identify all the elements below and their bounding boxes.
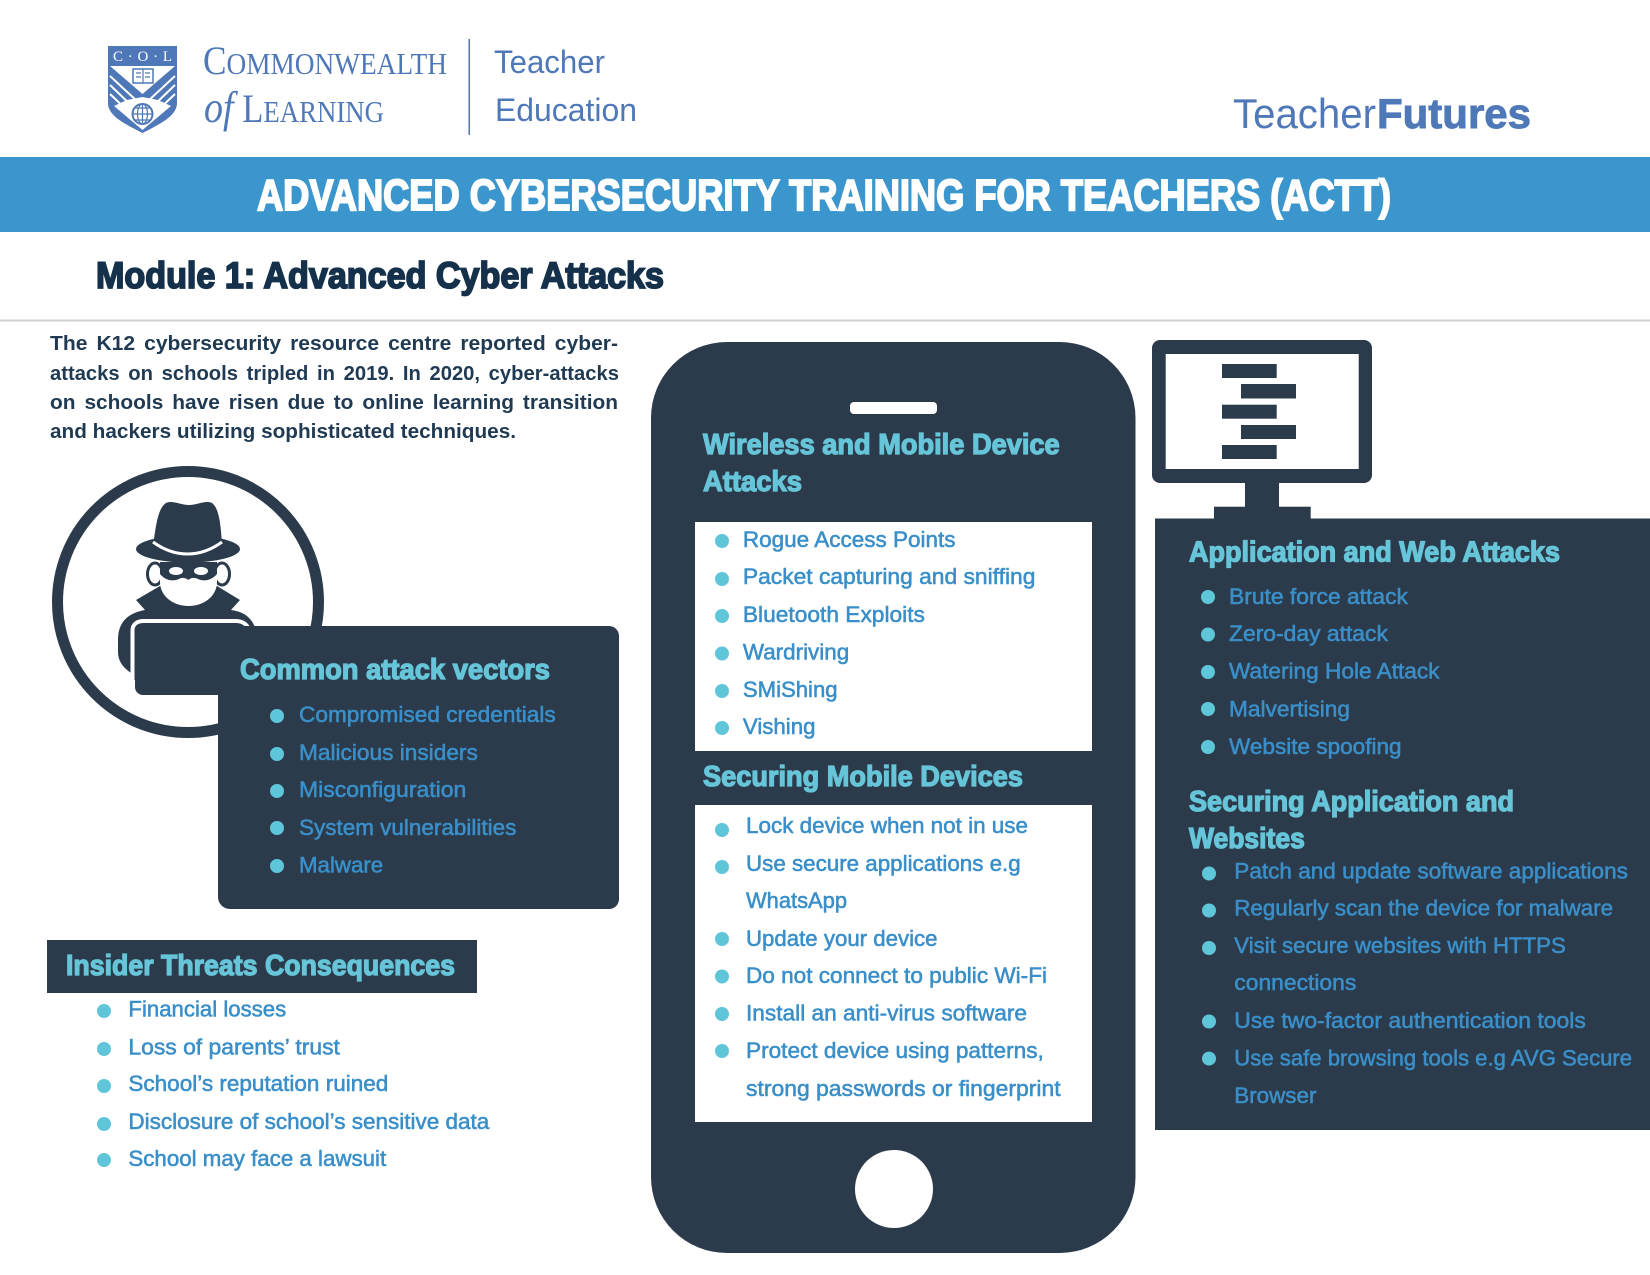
list: securing mobile devices: Install an anti-virus software bbox=[746, 1000, 1027, 1025]
list: wireless attacks: Packet capturing and sniffing bbox=[743, 564, 1035, 589]
heading: securing application and websites: Securing Application and bbox=[1189, 786, 1514, 818]
list: wireless attacks: SMiShing bbox=[743, 677, 838, 702]
list: securing application and websites: Browser bbox=[1234, 1083, 1316, 1108]
heading: wireless and mobile device attacks: Wireless and Mobile Device bbox=[703, 429, 1060, 461]
list: securing application and websites bbox=[1202, 858, 1632, 1108]
list: application and web attacks: Watering Hole Attack bbox=[1229, 659, 1441, 684]
logo wordmark: Commonwealth: COMMONWEALTH bbox=[203, 38, 447, 83]
list: securing mobile devices: Do not connect to public Wi-Fi bbox=[746, 963, 1047, 988]
intro paragraph: and hackers utilizing sophisticated techniques. bbox=[50, 421, 516, 443]
list: securing application and websites: Visit secure websites with HTTPS bbox=[1234, 933, 1566, 958]
list: securing application and websites: Use safe browsing tools e.g AVG Secure bbox=[1234, 1046, 1632, 1071]
list: insider threats consequences: Loss of parents’ trust bbox=[128, 1034, 340, 1059]
list: wireless attacks: Bluetooth Exploits bbox=[743, 602, 925, 627]
list: insider threats consequences: School’s reputation ruined bbox=[128, 1071, 388, 1096]
logo: TeacherFutures bbox=[1233, 90, 1531, 137]
panel: application and web attacks bbox=[1155, 518, 1650, 1130]
list: application and web attacks bbox=[1201, 584, 1441, 759]
list: application and web attacks: Zero-day attack bbox=[1229, 621, 1389, 646]
list: application and web attacks: Brute force attack bbox=[1229, 584, 1409, 609]
list: insider threats consequences: Disclosure of school’s sensitive data bbox=[128, 1109, 490, 1134]
list: securing application and websites: Patch and update software applications bbox=[1234, 858, 1628, 883]
logo: TeacherFutures: Futures bbox=[1377, 90, 1531, 137]
intro paragraph: The K12 cybersecurity resource centre reported cyber- bbox=[50, 333, 618, 355]
list: insider threats consequences bbox=[97, 996, 490, 1171]
list: attack vectors: Malware bbox=[299, 852, 383, 878]
title: ADVANCED CYBERSECURITY TRAINING FOR TEACHERS (ACTT) bbox=[257, 171, 1391, 220]
heading: securing mobile devices: Securing Mobile Devices bbox=[703, 761, 1023, 793]
logo: TeacherFutures: Teacher bbox=[1233, 90, 1376, 137]
list: wireless attacks: Rogue Access Points bbox=[743, 527, 956, 552]
intro paragraph bbox=[50, 333, 619, 443]
list: attack vectors: Misconfiguration bbox=[299, 777, 466, 802]
list: application and web attacks: Website spoofing bbox=[1229, 734, 1402, 759]
icon: hacker in circle bbox=[58, 472, 318, 732]
list: wireless attacks: Vishing bbox=[743, 714, 816, 739]
list: securing mobile devices: strong passwords or fingerprint bbox=[746, 1076, 1061, 1101]
list: wireless attacks bbox=[715, 527, 1035, 739]
heading: wireless and mobile device attacks bbox=[703, 429, 1060, 498]
module heading: Module 1: Advanced Cyber Attacks bbox=[96, 255, 664, 296]
heading: application and web attacks: Application and Web Attacks bbox=[1189, 536, 1560, 568]
logo wordmark: of Learning: of LEARNING bbox=[204, 83, 384, 132]
list: securing application and websites: Regularly scan the device for malware bbox=[1234, 895, 1613, 920]
panel: insider threats heading bbox=[47, 940, 477, 993]
list: securing mobile devices: Lock device when not in use bbox=[746, 813, 1028, 838]
list: securing mobile devices: Use secure applications e.g bbox=[746, 851, 1021, 876]
list: wireless attacks: Wardriving bbox=[743, 639, 849, 664]
list: securing application and websites: Use two-factor authentication tools bbox=[1234, 1008, 1586, 1033]
list: attack vectors: Compromised credentials bbox=[299, 702, 556, 727]
intro paragraph: on schools have risen due to online learning transition bbox=[50, 392, 618, 414]
intro paragraph: attacks on schools tripled in 2019. In 2020, cyber-attacks bbox=[50, 363, 619, 385]
icon: COL shield bbox=[108, 46, 177, 133]
list: securing mobile devices: Update your device bbox=[746, 926, 938, 951]
list: attack vectors: System vulnerabilities bbox=[299, 815, 516, 840]
list: attack vectors: Malicious insiders bbox=[299, 740, 478, 765]
icon: COL shield: C·O·L bbox=[113, 49, 172, 65]
list: securing mobile devices: Protect device using patterns, bbox=[746, 1038, 1044, 1063]
panel: common attack vectors bbox=[135, 626, 619, 909]
list: insider threats consequences: School may face a lawsuit bbox=[128, 1146, 386, 1171]
list: attack vectors bbox=[270, 702, 556, 878]
list: securing mobile devices bbox=[715, 813, 1061, 1101]
list: application and web attacks: Malvertising bbox=[1229, 696, 1350, 722]
heading: securing application and websites bbox=[1189, 786, 1514, 855]
panel: mobile phone bbox=[651, 342, 1136, 1253]
logo text: Teacher: Teacher bbox=[494, 44, 605, 80]
heading: securing application and websites: Websites bbox=[1189, 823, 1305, 855]
heading: wireless and mobile device attacks: Attacks bbox=[703, 466, 802, 498]
heading: insider threats consequences: Insider Threats Consequences bbox=[66, 950, 455, 982]
list: securing application and websites: connections bbox=[1234, 970, 1356, 995]
logo: Commonwealth of Learning bbox=[108, 38, 637, 135]
logo text: Education: Education bbox=[495, 92, 637, 128]
list: insider threats consequences: Financial losses bbox=[128, 996, 286, 1022]
icon: computer monitor bbox=[1152, 340, 1372, 520]
heading: common attack vectors: Common attack vectors bbox=[240, 654, 550, 686]
list: securing mobile devices: WhatsApp bbox=[746, 888, 847, 913]
title banner bbox=[0, 157, 1650, 232]
